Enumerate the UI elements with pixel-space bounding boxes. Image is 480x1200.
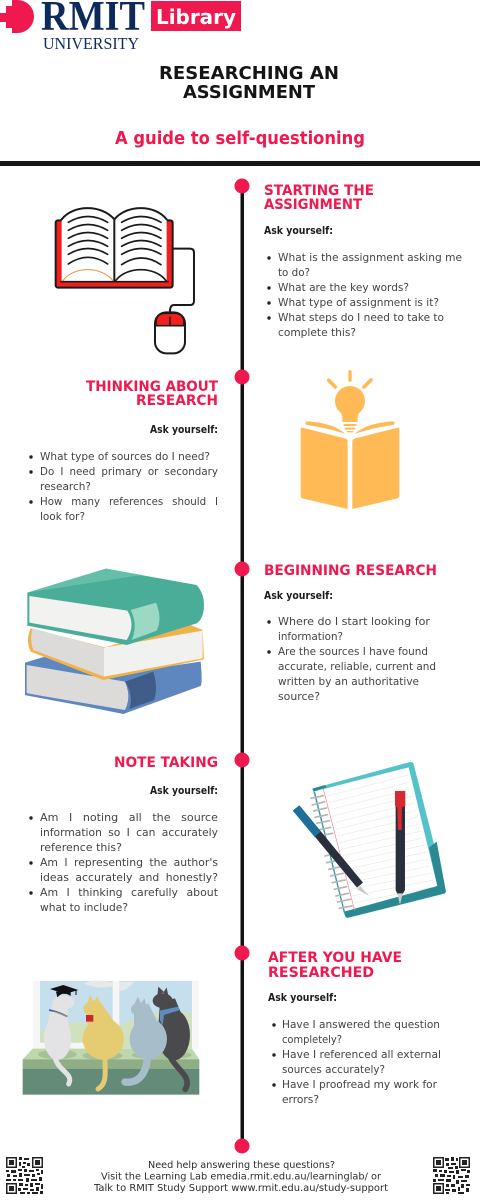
question list: Am I noting all the source xyxy=(40,811,218,824)
heading: ASSIGNMENT xyxy=(264,197,362,213)
logo: RMIT University Library: Library xyxy=(156,5,236,29)
question list: information? xyxy=(278,630,343,643)
prompt: Ask yourself: xyxy=(264,224,333,237)
grey-blue cat xyxy=(125,997,167,1082)
question list xyxy=(272,1018,441,1106)
footer help text: Talk to RMIT Study Support www.rmit.edu.au/study-support xyxy=(93,1183,388,1194)
icon: notebook and pens xyxy=(293,762,446,918)
yellow cat with bow tie xyxy=(83,995,124,1089)
heading: STARTING THE xyxy=(264,183,374,199)
logo: RMIT University Library xyxy=(0,0,241,53)
question list: completely? xyxy=(282,1033,342,1046)
footer help text xyxy=(93,1160,388,1194)
question list: accurate, reliable, current and xyxy=(278,660,436,673)
panel: after you have researched xyxy=(268,950,441,1106)
question list: What type of sources do I need? xyxy=(40,450,210,463)
question list: Am I representing the author's xyxy=(40,856,218,869)
question list: written by an authoritative xyxy=(278,675,419,688)
logo: RMIT University Library: UNIVERSITY xyxy=(43,34,139,53)
heading xyxy=(86,379,218,409)
black cat with collar xyxy=(153,987,190,1089)
question list: look for? xyxy=(40,510,85,523)
QR code: right xyxy=(433,1157,470,1194)
question list: complete this? xyxy=(278,326,356,339)
icon: open book with computer mouse xyxy=(56,208,194,353)
question list: Are the sources I have found xyxy=(278,645,428,658)
subtitle: A guide to self-questioning xyxy=(115,128,365,149)
question list xyxy=(267,251,462,339)
question list: research? xyxy=(40,480,91,493)
panel: starting the assignment xyxy=(264,183,462,339)
heading: NOTE TAKING xyxy=(114,755,218,771)
icon: book with light bulb xyxy=(301,370,399,509)
question list: reference this? xyxy=(40,841,122,854)
panel: thinking about research xyxy=(29,379,218,523)
title: ASSIGNMENT xyxy=(183,83,315,103)
footer help text: Need help answering these questions? xyxy=(148,1160,335,1171)
panel: note taking xyxy=(29,755,219,914)
heading xyxy=(264,183,374,213)
question list: What steps do I need to take to xyxy=(278,311,444,324)
heading: RESEARCH xyxy=(136,393,218,409)
heading: AFTER YOU HAVE xyxy=(268,950,402,966)
heading: RESEARCHED xyxy=(268,965,374,981)
heading xyxy=(268,950,402,981)
question list: What are the key words? xyxy=(278,281,409,294)
question list: What is the assignment asking me xyxy=(278,251,462,264)
question list: What type of assignment is it? xyxy=(278,296,439,309)
question list: sources accurately? xyxy=(282,1063,385,1076)
question list: information so I can accurately xyxy=(40,826,218,839)
heading: BEGINNING RESEARCH xyxy=(264,563,437,579)
QR code: left xyxy=(6,1157,43,1194)
footer help text: Visit the Learning Lab emedia.rmit.edu.au/learninglab/ or xyxy=(101,1172,382,1182)
question list: Am I thinking carefully about xyxy=(40,886,219,899)
question list: Have I answered the question xyxy=(282,1018,440,1031)
question list: Have I referenced all external xyxy=(282,1048,441,1061)
question list: Where do I start looking for xyxy=(278,615,430,628)
question list: Have I proofread my work for xyxy=(282,1078,437,1091)
question list: to do? xyxy=(278,266,310,279)
white cat with mortarboard xyxy=(44,985,78,1084)
question list xyxy=(29,811,219,914)
question list: Do I need primary or secondary xyxy=(40,465,218,478)
title: RESEARCHING AN xyxy=(159,64,339,84)
panel: beginning research xyxy=(264,563,437,703)
title xyxy=(159,64,339,103)
prompt: Ask yourself: xyxy=(264,589,333,602)
question list: ideas accurately and honestly? xyxy=(40,871,218,884)
question list: what to include? xyxy=(40,901,128,914)
prompt: Ask yourself: xyxy=(268,991,337,1004)
question list: errors? xyxy=(282,1093,319,1106)
prompt: Ask yourself: xyxy=(150,784,218,797)
prompt: Ask yourself: xyxy=(150,423,218,436)
question list xyxy=(267,615,436,703)
question list xyxy=(29,450,218,523)
question list: source? xyxy=(278,690,320,703)
icon: stack of books xyxy=(25,569,204,714)
illustration: four cats on a window sill xyxy=(23,981,199,1095)
timeline xyxy=(234,178,250,1154)
question list: How many references should I xyxy=(40,495,218,508)
heading: THINKING ABOUT xyxy=(86,379,218,395)
